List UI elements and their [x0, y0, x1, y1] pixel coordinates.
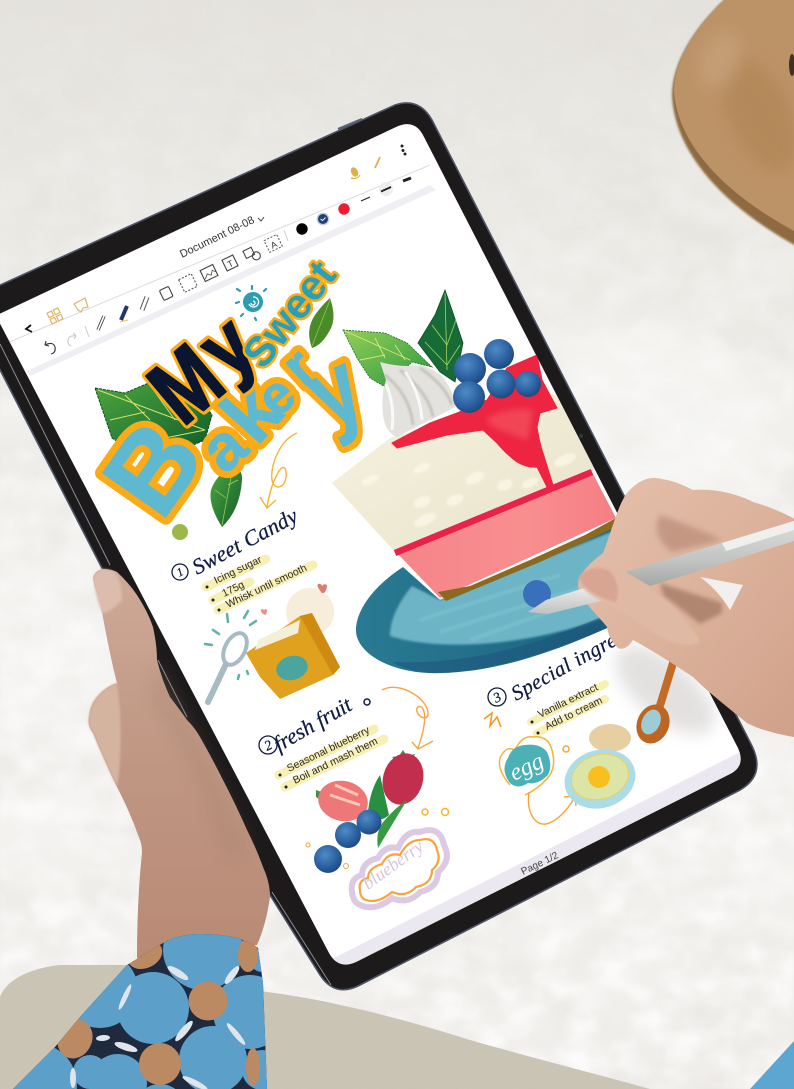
page edge band: [330, 752, 742, 968]
toolbar: [0, 144, 436, 376]
leaf: lower: [210, 465, 242, 527]
colour swatches: [296, 203, 350, 235]
heading: fresh fruit: [269, 691, 357, 756]
section 3: Special ingredients: [484, 602, 675, 824]
outer finger: [88, 683, 121, 787]
My navy letters: [144, 320, 254, 426]
Bakery orange backing: a: [186, 408, 261, 486]
ingredient list: Add to cream: [543, 694, 605, 733]
document title: Document 08-08: [178, 214, 256, 261]
leaf: large behind title: [94, 383, 212, 452]
leaf: top: [309, 298, 334, 348]
cake illustration: [332, 290, 640, 673]
stylus: [528, 521, 794, 614]
heading: 2: [262, 738, 275, 755]
sleeve: [0, 910, 300, 1089]
thumb: [578, 567, 700, 645]
My orange backing: M: [130, 325, 242, 443]
Bakery teal letters: a: [186, 408, 261, 486]
heading: Sweet Candy: [188, 503, 302, 579]
screen: [0, 124, 741, 965]
ingredient list: Seasonal blueberry: [285, 724, 372, 775]
cake cream: [332, 392, 594, 552]
leaf: dark: [418, 290, 463, 382]
blueberries: [453, 339, 541, 413]
icon: shapes: [242, 246, 261, 260]
Bakery teal letters: [102, 351, 358, 518]
ingredient list: Vanilla extract: [536, 681, 600, 721]
arrow: to Sweet Candy: [260, 433, 297, 508]
icon: more: [400, 144, 406, 156]
icon: pencil: [98, 316, 104, 330]
illustration: strawberries, berries: [314, 749, 429, 873]
wooden coaster: [672, 0, 794, 248]
Bakery orange backing: k: [204, 367, 299, 459]
tablet body: [0, 103, 757, 990]
icon: grid: [47, 308, 63, 324]
ingredient list: [278, 724, 384, 788]
icon: pen: [121, 306, 127, 320]
Bakery teal letters: y: [288, 330, 380, 450]
icon: text box: [222, 255, 238, 271]
heading: 3: [490, 690, 504, 707]
Bakery teal letters: B: [79, 399, 227, 537]
title: My Sweet Bakery: [95, 260, 363, 525]
ingredient list: Whisk until smooth: [224, 562, 309, 611]
arrow: [528, 792, 576, 824]
thumb nail: [579, 568, 618, 602]
illustration: egg: [557, 724, 643, 817]
icon: pencil gold: [375, 157, 380, 168]
whipped cream: [380, 362, 455, 437]
icon: marker: [142, 297, 147, 310]
shading along tablet: [150, 660, 250, 860]
power button: [338, 119, 362, 129]
squiggle: [484, 713, 501, 727]
screen contents: [0, 144, 742, 968]
page number: Page 1/2: [519, 850, 561, 878]
arrow: [382, 687, 433, 749]
Sweet: Sweet: [233, 252, 345, 376]
My orange backing: [142, 316, 258, 429]
Bakery orange backing: B: [79, 399, 227, 537]
icon: text recognise: A: [269, 239, 279, 251]
line widths: [361, 178, 411, 201]
finger pocket shade: [660, 583, 722, 624]
right hand: [528, 478, 794, 738]
Bakery orange backing: r: [269, 335, 327, 397]
icon: text recognise: [264, 235, 282, 252]
green dot: [172, 524, 188, 540]
blueberry at pen tip: [523, 580, 551, 608]
leaf: light: [343, 330, 432, 388]
Bakery teal letters: r: [269, 335, 327, 397]
icon: image: [200, 265, 218, 281]
icon: mic: [350, 167, 360, 179]
hand shadow on paper: [612, 642, 718, 738]
ingredient list: [206, 554, 313, 612]
icon: bookmark: [74, 298, 88, 312]
heading: Special ingredients: [507, 602, 667, 705]
My navy letters: y: [180, 296, 272, 396]
icon: text box: T: [226, 258, 236, 270]
icon: back: [26, 325, 32, 332]
My navy letters: M: [130, 325, 242, 443]
cloud label: blueberry: blueberry: [359, 836, 427, 893]
ingredient list: [530, 681, 605, 734]
thumb nail: [93, 569, 122, 614]
ingredient list: 175g: [220, 579, 247, 600]
Bakery orange backing: e: [245, 364, 307, 428]
section 2: fresh fruit: [259, 687, 448, 907]
cloud label: blueberry: [306, 808, 448, 907]
illustration: wooden spoon: [631, 663, 675, 749]
Bakery orange backing: y: [288, 330, 380, 450]
icon: selection: [179, 274, 197, 292]
second sleeve corner: [750, 1041, 794, 1089]
pink layer: [397, 472, 616, 598]
My orange backing: y: [180, 296, 272, 396]
icon: eraser: [159, 286, 173, 301]
icon: redo: [68, 333, 76, 346]
gap between fingers: [700, 577, 743, 610]
chair: [0, 965, 650, 1089]
Bakery teal letters: e: [245, 364, 307, 428]
Bakery teal letters: k: [204, 367, 299, 459]
cloud label: egg: egg: [506, 748, 548, 786]
illustration: sugar bag and spoon: [205, 584, 340, 702]
section 1: Sweet Candy: [172, 503, 340, 702]
Bakery orange backing: [95, 345, 363, 525]
plate: [356, 529, 612, 674]
crust: [438, 518, 616, 601]
red icing: [392, 355, 557, 487]
camera: [579, 434, 583, 438]
left hand: [88, 569, 270, 958]
ingredient list: Icing sugar: [212, 554, 264, 587]
cloud label: egg: [499, 737, 554, 795]
heading: 1: [174, 564, 186, 580]
icon: undo: [45, 341, 55, 354]
icon: sun: [236, 286, 266, 320]
ingredient list: Boil and mash them: [291, 735, 380, 787]
